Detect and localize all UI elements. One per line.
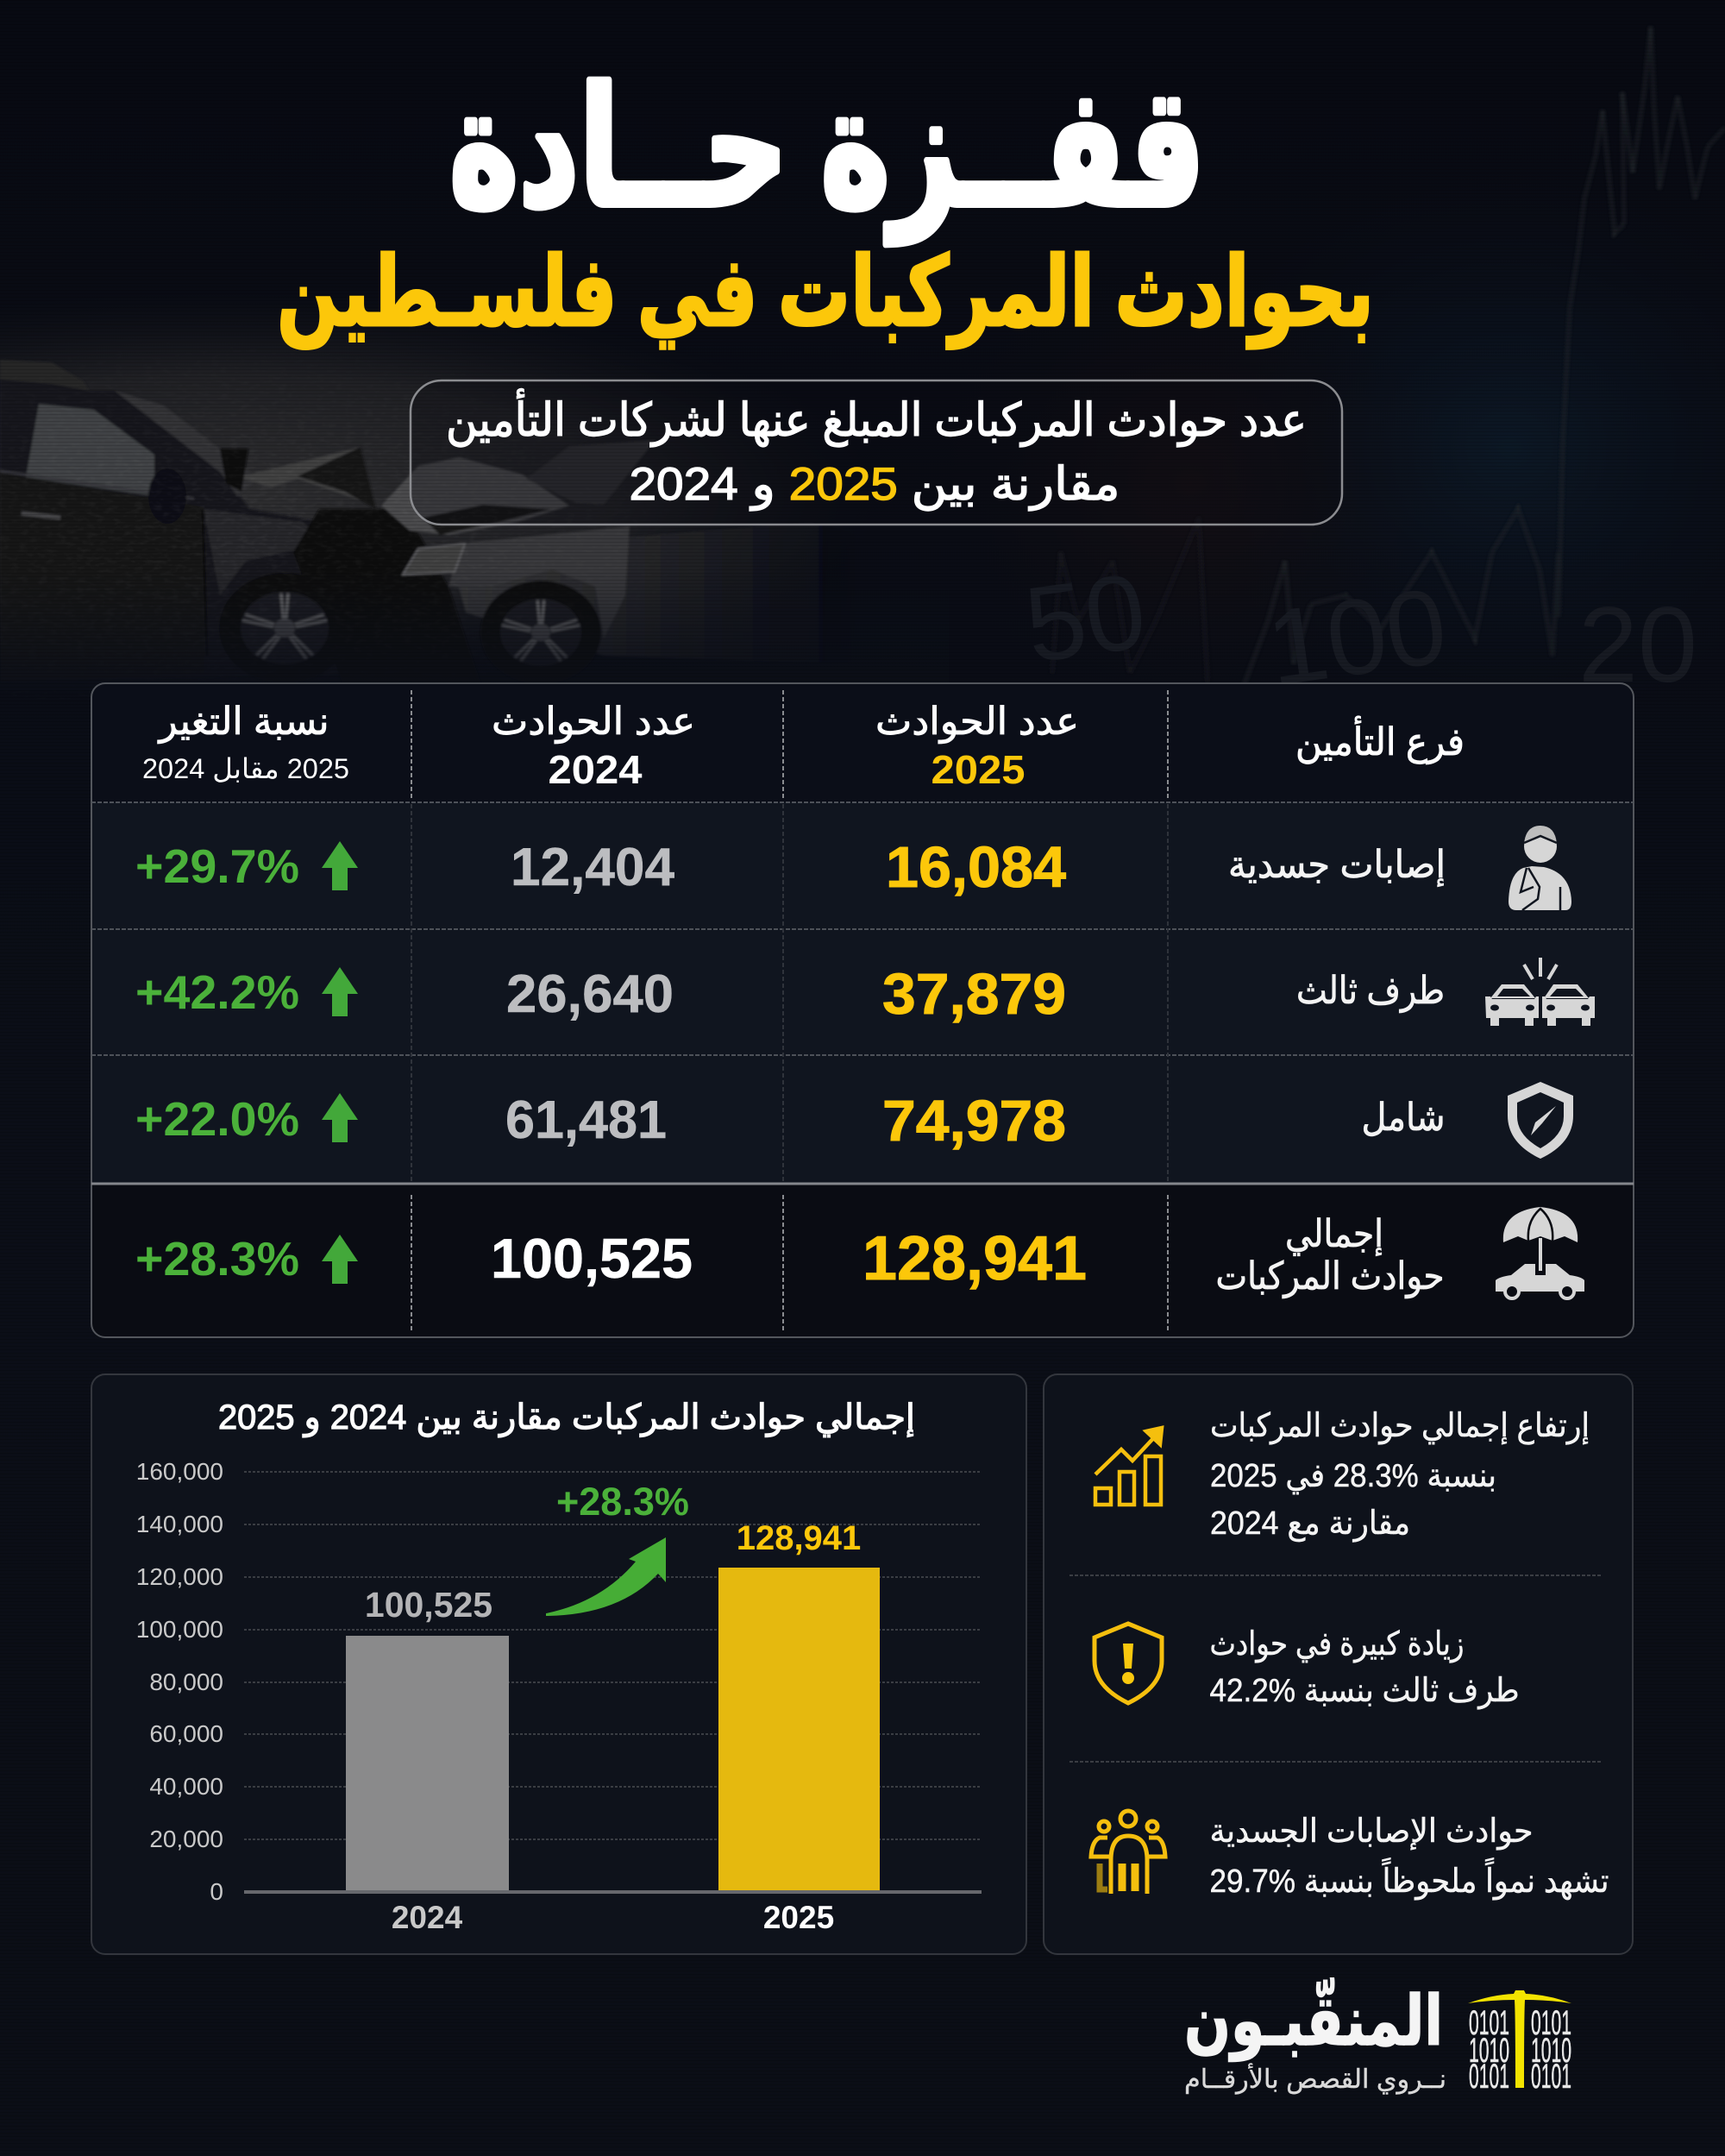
panel: bar chart (91, 1374, 1026, 1954)
figures 2025: 128,941 (862, 1224, 1087, 1293)
y axis labels: 100,000 (136, 1616, 223, 1643)
left car body (0, 380, 414, 682)
background: faint axis numbers: 50 (1019, 551, 1153, 686)
background: faint axis numbers: 20 (1578, 586, 1697, 705)
table header: نسبة التغير (158, 701, 329, 744)
insight 2: زيادة كبيرة في حوادث (1209, 1626, 1465, 1663)
right car windshield (526, 440, 656, 505)
icon: shield (1508, 1082, 1573, 1159)
row labels (1216, 844, 1446, 1298)
change percentages: +28.3% (135, 1232, 299, 1285)
growth arrow (546, 1537, 666, 1616)
gridlines (244, 1472, 982, 1839)
logo: binary digits: 0101 (1469, 2004, 1509, 2042)
insight 1: مقارنة مع 2024 (1210, 1505, 1410, 1543)
insight 3: تشهد نمواً ملحوظاً بنسبة ‎29.7% (1209, 1857, 1609, 1901)
panel: key insights (1044, 1374, 1633, 1954)
logo: binary digits: 0101 (1531, 2004, 1571, 2042)
figures 2024: 100,525 (491, 1227, 693, 1290)
logo: binary digits: 1010 (1469, 2032, 1509, 2070)
up arrows (322, 841, 358, 1284)
figures 2025 (862, 835, 1087, 1293)
table header: عدد الحوادث (492, 701, 695, 744)
y axis labels: 140,000 (136, 1511, 223, 1537)
bar 2024 (346, 1585, 509, 1935)
bar 2025: 128,941 (737, 1519, 861, 1557)
y axis labels: 80,000 (149, 1669, 223, 1695)
y axis labels: 60,000 (149, 1720, 223, 1747)
bar 2024: 2024 (392, 1900, 463, 1935)
logo (1184, 1978, 1571, 2096)
y axis labels: 40,000 (149, 1773, 223, 1800)
logo: tagline: نــروي القصص بالأرقــام (1184, 2062, 1446, 2095)
row labels: حوادث المركبات (1216, 1255, 1444, 1298)
headlight (403, 544, 465, 575)
logo: pickaxe (1468, 1990, 1571, 2088)
left wheel (219, 573, 350, 683)
subtitle line 2: مقارنة بين 2025 و 2024 (630, 459, 1120, 511)
table panels (91, 683, 1634, 1337)
bar 2025: 2025 (763, 1900, 834, 1935)
y axis labels: 120,000 (136, 1563, 223, 1590)
change percentages (135, 839, 299, 1285)
background: faint axis numbers: 100 (1260, 566, 1453, 709)
logo: wordmark: المنقّبـون (1184, 1978, 1443, 2062)
figures 2024: 12,404 (511, 838, 675, 897)
table header: عدد الحوادث (875, 701, 1079, 744)
subtitle line 1: عدد حوادث المركبات المبلغ عنها لشركات التأمين (446, 388, 1307, 447)
icon: group of people (1091, 1811, 1165, 1894)
chart title: إجمالي حوادث المركبات مقارنة بين 2024 و 2025 (218, 1399, 915, 1437)
figures 2024: 61,481 (505, 1091, 667, 1150)
table header (142, 701, 1465, 792)
right car hood (381, 457, 569, 535)
figures 2024 (491, 838, 693, 1290)
row labels: إصابات جسدية (1228, 844, 1446, 887)
bar 2025 (718, 1519, 880, 1935)
bar 2024: 100,525 (365, 1585, 492, 1625)
change percentages: +22.0% (135, 1092, 299, 1146)
subtitle box (411, 380, 1342, 525)
insight 3 (1209, 1813, 1609, 1901)
icon: injured person (1509, 826, 1571, 910)
insight 2: طرف ثالث بنسبة ‎42.2% (1209, 1673, 1520, 1710)
logo: binary digits: 0101 (1531, 2058, 1571, 2096)
crumpled hood (238, 447, 375, 506)
insight 2 (1209, 1626, 1520, 1710)
figures 2025: 16,084 (886, 835, 1066, 900)
left car window (26, 404, 154, 496)
y axis labels: 20,000 (149, 1826, 223, 1852)
table header: 2024 (549, 747, 643, 792)
insight 1: إرتفاع إجمالي حوادث المركبات (1210, 1408, 1590, 1445)
row labels: إجمالي (1285, 1213, 1383, 1256)
figures 2024: 26,640 (506, 965, 674, 1024)
background: faint axis numbers (1019, 551, 1697, 709)
table header: 2025 مقابل 2024 (142, 753, 349, 784)
background: market chart (1052, 27, 1725, 690)
icon: two cars colliding (1485, 958, 1595, 1026)
figures 2025: 74,978 (882, 1089, 1066, 1153)
right car body (448, 522, 862, 664)
y axis labels: 0 (210, 1878, 223, 1905)
logo: binary digits: 0101 (1469, 2058, 1509, 2096)
y axis labels (136, 1458, 223, 1905)
insight 1: بنسبة ‎28.3% في 2025 (1210, 1458, 1496, 1494)
logo: binary digits (1469, 2004, 1571, 2096)
title line 1: قفــزة حــادة (449, 57, 1205, 245)
left car windshield (115, 391, 259, 496)
background: crashed cars (0, 360, 862, 690)
icon: umbrella over car (1496, 1207, 1584, 1298)
background (0, 27, 1724, 682)
change percentages: +42.2% (135, 965, 299, 1019)
row labels: شامل (1361, 1097, 1446, 1139)
title (277, 57, 1374, 349)
logo: binary digits: 1010 (1531, 2032, 1571, 2070)
title line 2: بحوادث المركبات في فلسـطين (277, 238, 1374, 349)
data table (91, 683, 1634, 1337)
row labels: طرف ثالث (1296, 970, 1445, 1013)
wrecked centre (293, 509, 483, 690)
figures 2025: 37,879 (882, 962, 1066, 1027)
right wheel (480, 581, 601, 684)
growth label: +28.3% (556, 1480, 689, 1524)
icon: warning shield (1095, 1624, 1162, 1703)
change percentages: +29.7% (135, 839, 299, 893)
icon: rising chart (1095, 1428, 1162, 1505)
insight 3: حوادث الإصابات الجسدية (1209, 1813, 1534, 1851)
insight 1 (1210, 1408, 1590, 1543)
table header: 2025 (932, 747, 1025, 792)
y axis labels: 160,000 (136, 1458, 223, 1485)
table header: فرع التأمين (1295, 715, 1465, 764)
